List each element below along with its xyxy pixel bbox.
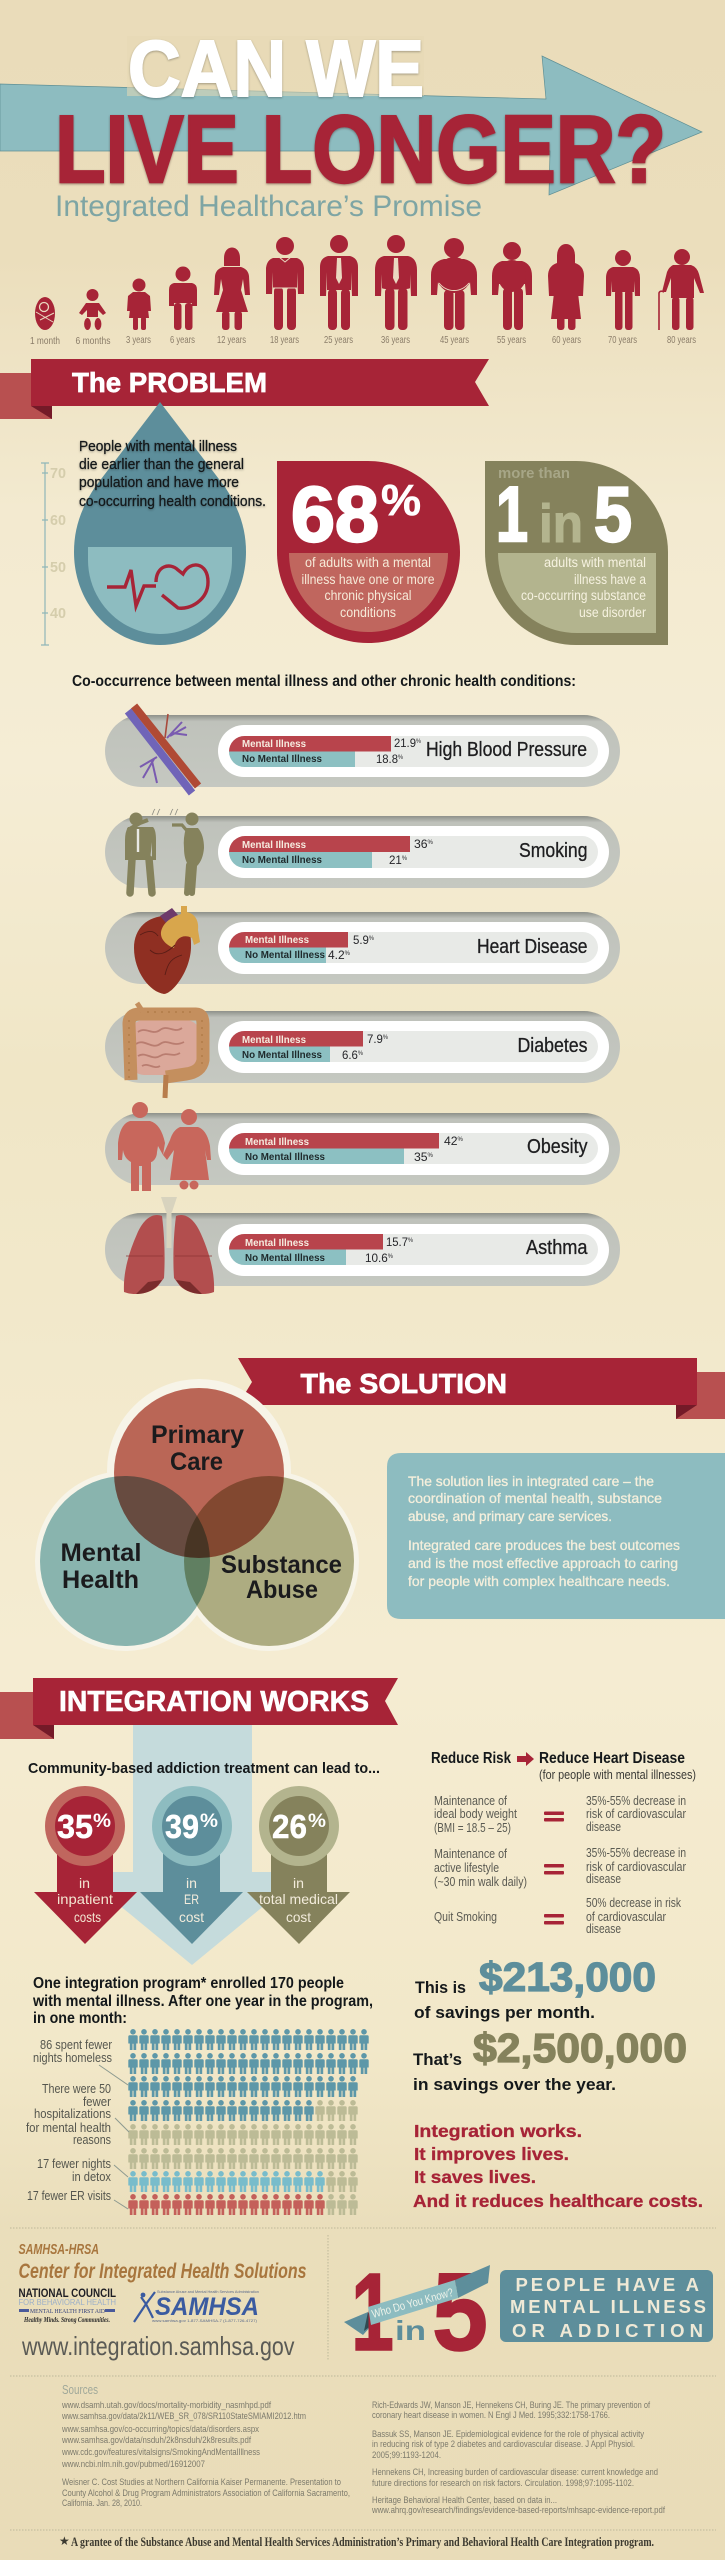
sources right: in reducing risk of type 2 diabetes and cardiovascular disease. J Appl Physiol. — [372, 2439, 635, 2450]
text: one integration program: One integration program* enrolled 170 people — [33, 1975, 344, 1992]
label: substance abuse — [221, 1551, 342, 1604]
risk factors: Quit Smoking — [434, 1910, 497, 1924]
figure: 60 years — [548, 244, 584, 330]
pictogram labels: 86 spent fewer — [40, 2038, 112, 2052]
icon: couple — [118, 1102, 211, 1191]
bars: 15.7 — [386, 1235, 409, 1249]
panel: 1 in 5: 5 — [594, 470, 632, 558]
stat arrow: 26 percent: % — [308, 1811, 326, 1832]
text: one integration program: with mental illness. After one year in the program, — [32, 1993, 373, 2010]
outcomes — [586, 1794, 686, 1936]
sources left: www.dsamh.utah.gov/docs/mortality-morbidity_nasmhpd.pdf — [61, 2400, 271, 2411]
text: one integration program — [32, 1975, 373, 2027]
figure: 3 years — [127, 278, 151, 330]
figure: 6 months — [79, 289, 106, 330]
bars: % — [408, 1238, 414, 1244]
panel: life expectancy drop — [41, 402, 266, 645]
stat arrow: 35 percent — [34, 1786, 137, 1944]
pictogram labels: fewer — [83, 2095, 111, 2109]
number: 213,000: $213,000 — [479, 1954, 656, 2000]
banner: the problem — [0, 359, 489, 419]
panel: 1 in 5: use disorder — [579, 605, 646, 620]
logo: national council: MENTAL HEALTH FIRST AID — [30, 2308, 105, 2315]
panel: 1 in 5: 1 — [496, 470, 528, 558]
panel: savings: This is — [415, 1978, 466, 1997]
figure labels: 80 years — [667, 334, 696, 346]
stat arrow: 35 percent: in — [79, 1875, 90, 1891]
panel: solution text: abuse, and primary care services. — [408, 1508, 612, 1524]
risk factors — [434, 1794, 527, 1924]
label: mental health: Health — [62, 1566, 139, 1594]
sources left: www.cdc.gov/features/vitalsigns/SmokingAndMentalIllness — [61, 2447, 260, 2458]
sources right: Heritage Behavioral Health Center, based on data in... — [372, 2495, 557, 2506]
sources right — [371, 2400, 665, 2516]
age scale: 60 — [50, 512, 66, 529]
heading: reduce risk: Reduce Risk — [431, 1750, 511, 1767]
figure labels: 55 years — [497, 334, 526, 346]
bars — [229, 1031, 389, 1062]
logo: national council: Healthy Minds. Strong Communities. — [23, 2315, 110, 2324]
panel: 68 percent: chronic physical — [324, 588, 412, 603]
logo: national council: FOR BEHAVIORAL HEALTH — [18, 2297, 116, 2307]
label: mental health — [60, 1539, 142, 1594]
panel: 68 percent: % — [381, 476, 421, 525]
figure labels: 12 years — [217, 334, 246, 346]
sources left: County Alcohol & Drug Program Administrators Association of California Sacramento, — [62, 2488, 350, 2499]
row: smoking: Smoking — [519, 840, 588, 862]
figure labels: 70 years — [608, 334, 637, 346]
panel: solution text: Integrated care produces the best outcomes — [408, 1537, 680, 1553]
bars: % — [402, 856, 408, 862]
logo: center for integrated health solutions: Center for Integrated Health Solutions — [18, 2260, 306, 2283]
figure: 18 years — [266, 237, 304, 330]
age scale: 40 — [50, 605, 66, 622]
bars — [229, 932, 375, 963]
figure: 12 years — [214, 248, 250, 330]
panel: 68 percent: of adults with a mental — [305, 555, 431, 570]
icon: heartbeat — [107, 565, 208, 608]
risk factors: (~30 min walk daily) — [434, 1875, 527, 1889]
icon: smokers — [125, 809, 204, 893]
sources right: Hennekens CH, Increasing burden of cardiovascular disease: current knowledge and — [372, 2467, 658, 2478]
outcomes: 35%-55% decrease in — [586, 1846, 686, 1860]
sources right: future directions for research on risk factors. Circulation. 1998;97:1095-1102. — [372, 2478, 634, 2489]
risk factors: ideal body weight — [434, 1807, 517, 1821]
heading: co-occurrence: Co-occurrence between mental illness and other chronic health conditions: — [72, 673, 576, 690]
bars — [229, 1133, 464, 1164]
icon: lungs — [124, 1197, 214, 1294]
pictogram labels: reasons — [73, 2133, 111, 2147]
bars: Mental Illness — [242, 739, 306, 750]
bars: 5.9 — [353, 933, 370, 947]
panel: savings — [413, 1954, 687, 2094]
problem text: People with mental illness — [79, 438, 237, 455]
logo: samhsa: SAMHSA — [155, 2293, 259, 2321]
figure labels: 18 years — [270, 334, 299, 346]
sources left — [61, 2382, 350, 2509]
pictogram labels: There were 50 — [42, 2082, 111, 2096]
figure labels: 45 years — [440, 334, 469, 346]
pictogram labels: 17 fewer ER visits — [27, 2189, 111, 2203]
label: substance abuse: Substance — [221, 1551, 342, 1579]
stat arrow: 39 percent: 39 — [165, 1808, 199, 1845]
stat arrow: 39 percent: in — [186, 1875, 197, 1891]
row: heart disease — [105, 906, 620, 994]
callout: integration works — [413, 2121, 703, 2211]
row: asthma — [105, 1197, 620, 1294]
bars: % — [358, 1051, 364, 1057]
pictogram labels: 17 fewer nights — [37, 2157, 111, 2171]
figure: 70 years — [606, 250, 640, 330]
icon: blood vessel — [128, 706, 198, 793]
bars: % — [388, 1254, 394, 1260]
panel: reduce risk — [431, 1750, 696, 1936]
stat arrow: 35 percent: costs — [74, 1909, 101, 1925]
figure: 45 years — [431, 238, 477, 330]
sources left: Weisner C. Cost Studies at Northern California Kaiser Permanente. Presentation to — [62, 2477, 341, 2488]
banner: integration works — [0, 1678, 398, 1739]
bars: % — [428, 840, 434, 846]
bars: % — [383, 1035, 389, 1041]
panel: 1 in 5: illness have a — [574, 572, 646, 587]
age scale: 50 — [50, 559, 66, 576]
panel: solution text: The solution lies in integrated care – the — [408, 1473, 654, 1489]
panel: 68 percent: 68 — [291, 470, 379, 558]
pictogram labels: for mental health — [26, 2121, 111, 2135]
label: primary care — [151, 1421, 244, 1476]
figure: 55 years — [492, 242, 532, 330]
bars: No Mental Illness — [242, 754, 322, 765]
figure: 6 years — [169, 266, 197, 330]
bars: 18.8 — [376, 752, 399, 766]
problem text: die earlier than the general — [79, 456, 244, 473]
sources right: www.ahrq.gov/research/findings/evidence-based-reports/mhsapc-evidence-report.pdf — [371, 2505, 665, 2516]
logo: 1 in 5 who do you know: 5 — [432, 2251, 488, 2374]
bars: % — [345, 951, 351, 957]
bars: Mental Illness — [245, 935, 309, 946]
stat arrow: 39 percent: ER — [184, 1891, 199, 1907]
text: one integration program: in one month: — [33, 2010, 127, 2027]
stat arrow: 26 percent: 26 — [272, 1808, 307, 1845]
heading: reduce heart disease: Reduce Heart Disease — [539, 1750, 685, 1767]
banner: the solution — [238, 1358, 725, 1419]
banner: the solution: The SOLUTION — [300, 1368, 507, 1399]
bars: 21 — [389, 853, 402, 867]
sources left: www.samhsa.gov/co-occurring/topics/data/disorders.aspx — [61, 2424, 259, 2435]
icon: intestines — [129, 1003, 203, 1098]
figure: 36 years — [375, 235, 417, 330]
outcomes: 50% decrease in risk — [586, 1896, 682, 1910]
row: heart disease: Heart Disease — [477, 936, 588, 958]
row: obesity — [105, 1102, 620, 1191]
callout: people have a mental illness: PEOPLE HAVE A — [516, 2274, 699, 2295]
figure labels: 36 years — [381, 334, 410, 346]
risk factors: Maintenance of — [434, 1847, 507, 1861]
row: obesity: Obesity — [527, 1136, 588, 1158]
subtitle: Integrated Healthcare’s Promise — [55, 190, 482, 223]
figure: 1 month — [35, 297, 55, 330]
logo: center for integrated health solutions: SAMHSA-HRSA — [18, 2241, 99, 2258]
logo: national council — [18, 2288, 116, 2324]
sources left: California. Jan. 28, 2010. — [62, 2498, 142, 2509]
logo: center for integrated health solutions — [18, 2241, 306, 2283]
bars: % — [398, 755, 404, 761]
logo: 1 in 5 who do you know: in — [395, 2315, 426, 2346]
bars: 21.9 — [394, 736, 417, 750]
icon: drop — [74, 402, 246, 645]
figure labels: 60 years — [552, 334, 581, 346]
icon: red arrow — [517, 1752, 534, 1766]
panel: 1 in 5: more than — [498, 465, 570, 482]
problem text: co-occurring health conditions. — [79, 493, 266, 510]
panel: 1 in 5: adults with mental — [544, 555, 646, 570]
panel: solution text: coordination of mental health, substance — [408, 1490, 662, 1506]
bars: 10.6 — [365, 1251, 388, 1265]
row: asthma: Asthma — [526, 1237, 588, 1259]
outcomes: disease — [586, 1922, 621, 1936]
callout: integration works: Integration works. — [414, 2121, 582, 2141]
logo: samhsa: www.samhsa.gov 1-877-SAMHSA-7 (1-877-726-4727) — [152, 2319, 257, 2323]
icon: heart — [134, 906, 200, 994]
bars: Mental Illness — [242, 840, 306, 851]
figure labels: 3 years — [126, 334, 151, 346]
sources right: Rich-Edwards JW, Manson JE, Hennekens CH, Buring JE. The primary prevention of — [372, 2400, 650, 2411]
stat arrow: 39 percent: % — [200, 1811, 218, 1832]
equals signs — [544, 1812, 564, 1924]
callout: integration works: And it reduces healthcare costs. — [413, 2191, 703, 2211]
bars: 7.9 — [367, 1032, 384, 1046]
outcomes: of cardiovascular — [586, 1910, 666, 1924]
callout: integration works: It saves lives. — [414, 2167, 536, 2187]
callout: people have a mental illness: MENTAL ILLNESS — [510, 2296, 706, 2317]
panel: 68 percent — [277, 461, 460, 643]
panel: 68 percent: illness have one or more — [302, 572, 434, 587]
outcomes: disease — [586, 1872, 621, 1886]
row: high blood pressure: High Blood Pressure — [426, 739, 587, 761]
bars: % — [369, 936, 375, 942]
figure labels: 25 years — [324, 334, 353, 346]
sources left: www.ncbi.nlm.nih.gov/pubmed/16912007 — [61, 2459, 205, 2470]
footnote: ★ — [59, 2534, 70, 2548]
header: title arrow and headline — [0, 24, 702, 223]
pictogram labels: hospitalizations — [34, 2107, 111, 2121]
bars — [229, 736, 422, 767]
stat arrow: 26 percent — [247, 1786, 350, 1944]
callout: people have a mental illness — [500, 2270, 713, 2342]
label: mental health: Mental — [60, 1539, 142, 1567]
row: high blood pressure — [105, 706, 620, 793]
drop inner fill — [88, 547, 232, 634]
sources left: www.samhsa.gov/data/2k11/WEB_SR_078/SR110StateSMIAMI2012.htm — [61, 2411, 306, 2422]
bars: % — [428, 1153, 434, 1159]
bars: No Mental Illness — [245, 1253, 325, 1264]
banner: integration works: INTEGRATION WORKS — [59, 1686, 369, 1718]
outcomes: risk of cardiovascular — [586, 1860, 686, 1874]
figure: 80 years — [659, 249, 704, 330]
bars: 4.2 — [328, 948, 345, 962]
bars: 42 — [444, 1134, 457, 1148]
problem text: population and have more — [79, 474, 239, 491]
life stage figures — [30, 235, 704, 347]
bars: Mental Illness — [242, 1035, 306, 1046]
row: diabetes: Diabetes — [518, 1035, 588, 1057]
bars: No Mental Illness — [245, 1152, 325, 1163]
figure: 25 years — [320, 235, 358, 330]
bars: No Mental Illness — [242, 1050, 322, 1061]
outcomes: risk of cardiovascular — [586, 1807, 686, 1821]
label: substance abuse: Abuse — [246, 1576, 318, 1604]
venn diagram — [35, 1379, 359, 1651]
stat arrow: 35 percent: inpatient — [57, 1891, 113, 1907]
panel: savings: of savings per month. — [414, 2003, 595, 2022]
arrow: large light background arrow — [79, 1725, 305, 1965]
bars: 6.6 — [342, 1048, 359, 1062]
bars: Mental Illness — [245, 1137, 309, 1148]
outcomes: disease — [586, 1820, 621, 1834]
panel: savings: That’s — [413, 2050, 462, 2069]
stat arrow: 26 percent: in — [293, 1875, 304, 1891]
panel: savings: in savings over the year. — [413, 2075, 616, 2094]
panel: 1 in 5: co-occurring substance — [521, 588, 646, 603]
risk factors: active lifestyle — [434, 1861, 499, 1875]
logo: samhsa: Substance Abuse and Mental Health Services Administration — [157, 2290, 259, 2294]
callout: people have a mental illness: OR ADDICTION — [512, 2320, 703, 2341]
label: primary care: Care — [170, 1448, 223, 1476]
bars: No Mental Illness — [242, 855, 322, 866]
logo: 1 in 5 who do you know: 1 — [351, 2251, 394, 2374]
risk factors: Maintenance of — [434, 1794, 507, 1808]
bars: No Mental Illness — [245, 950, 325, 961]
risk factors: (BMI = 18.5 – 25) — [434, 1821, 511, 1835]
sources right: 2005;99:1193-1204. — [372, 2450, 441, 2461]
bars — [229, 1234, 414, 1265]
banner: the problem: The PROBLEM — [72, 367, 267, 398]
row: smoking — [105, 809, 620, 893]
bars — [229, 836, 434, 868]
stat arrow: 26 percent: cost — [286, 1909, 311, 1925]
bars: % — [416, 739, 422, 745]
stat arrow: 39 percent — [140, 1786, 243, 1944]
figure labels: 6 years — [170, 334, 195, 346]
age scale: 70 — [50, 465, 66, 482]
pictogram: 170 people — [128, 2029, 369, 2215]
logo: 1 in 5 who do you know: Who Do You Know? — [371, 2287, 455, 2321]
pictogram labels: in detox — [72, 2170, 112, 2184]
bars: 36 — [414, 837, 427, 851]
title: can we: CAN WE — [128, 24, 424, 113]
bars: Mental Illness — [245, 1238, 309, 1249]
subheading: (for people with mental illnesses) — [539, 1768, 696, 1782]
icon: teal arrow — [0, 56, 702, 195]
sources left: www.samhsa.gov/data/nsduh/2k8nsduh/2k8results.pdf — [61, 2435, 251, 2446]
panel: 1 in 5: in — [539, 494, 583, 554]
heading: community-based: Community-based addiction treatment can lead to... — [28, 1760, 380, 1777]
stat arrow: 26 percent: total medical — [259, 1891, 338, 1907]
logo: samhsa — [134, 2290, 259, 2323]
stat arrow: 35 percent: % — [93, 1811, 111, 1832]
sources left: Sources — [62, 2382, 98, 2397]
panel: 68 percent: conditions — [340, 605, 396, 620]
sources right: Bassuk SS, Manson JE. Epidemiological evidence for the role of physical activity — [372, 2429, 644, 2440]
age scale — [41, 463, 66, 645]
row: diabetes — [105, 1003, 620, 1098]
figure labels: 1 month — [30, 335, 60, 347]
figure labels — [30, 334, 696, 347]
panel: solution text: for people with complex healthcare needs. — [408, 1573, 670, 1589]
stat arrow: 39 percent: cost — [179, 1909, 204, 1925]
figure labels: 6 months — [76, 335, 110, 347]
logo: 1 in 5 who do you know — [344, 2251, 490, 2374]
stat arrow: 35 percent: 35 — [57, 1808, 93, 1845]
bars: 35 — [414, 1150, 427, 1164]
website url: www.integration.samhsa.gov — [21, 2331, 294, 2361]
bars: % — [458, 1137, 464, 1143]
number: 2,500,000: $2,500,000 — [473, 2025, 687, 2071]
pictogram labels — [26, 2038, 129, 2209]
callout: integration works: It improves lives. — [414, 2144, 569, 2164]
outcomes: 35%-55% decrease in — [586, 1794, 686, 1808]
panel: 1 in 5 — [485, 461, 668, 645]
label: primary care: Primary — [151, 1421, 244, 1449]
logo: national council: NATIONAL COUNCIL — [18, 2288, 116, 2300]
sources right: coronary heart disease in women. N Engl J Med. 1995;332:1758-1766. — [372, 2410, 610, 2421]
panel: solution text: and is the most effective approach to caring — [408, 1555, 678, 1571]
panel: solution text — [387, 1453, 725, 1619]
pictogram labels: nights homeless — [33, 2051, 112, 2065]
problem text — [79, 438, 266, 510]
